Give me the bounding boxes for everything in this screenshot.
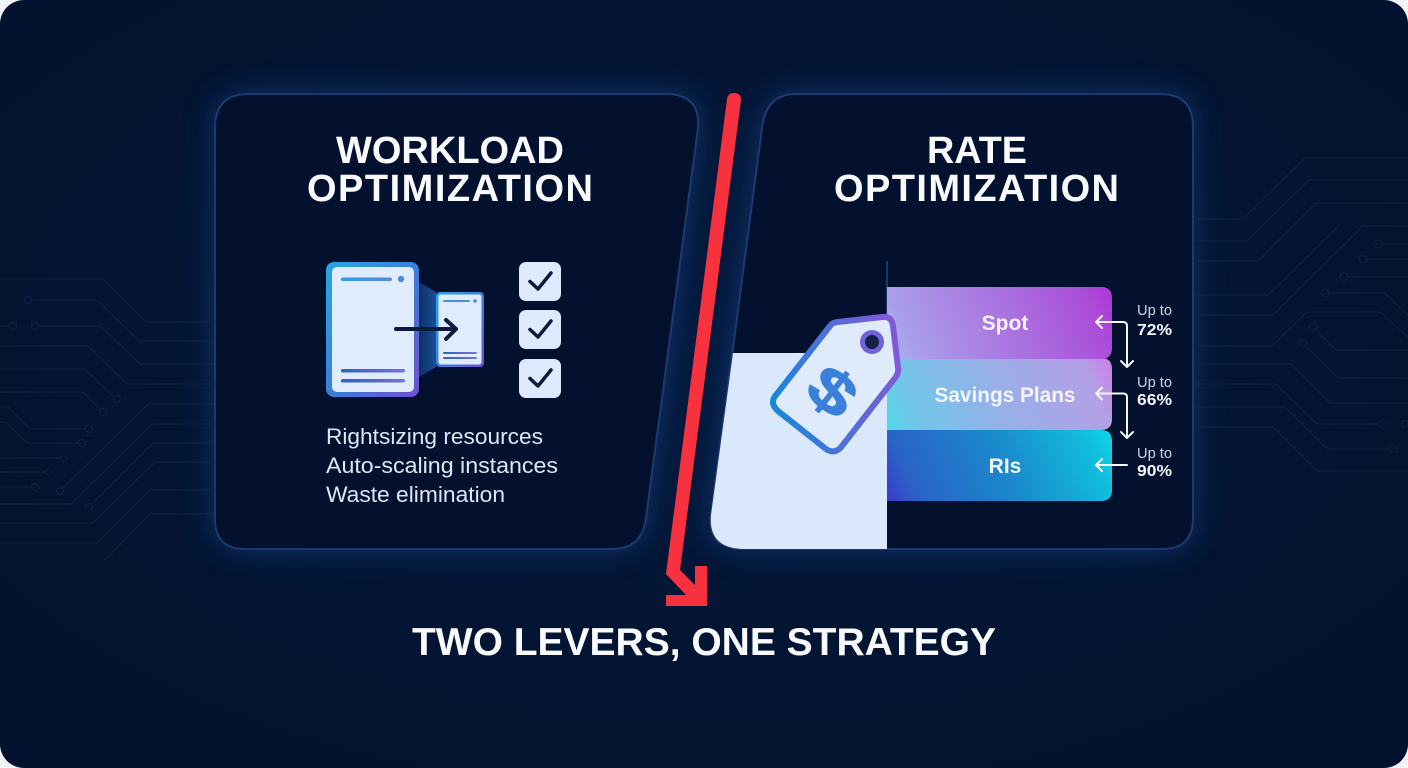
light price block (711, 353, 887, 549)
panel outline (711, 94, 1193, 549)
heading: rate optimization: RATE (927, 130, 1027, 172)
panel outline (215, 94, 698, 549)
list: workload tactics (326, 424, 558, 507)
icon: price tag: $ (794, 351, 871, 432)
tier: spot: Spot (982, 312, 1028, 335)
title: two levers, one strategy: TWO LEVERS, ONE STRATEGY (412, 621, 996, 664)
tier: savings plans (887, 358, 1112, 430)
heading: workload optimization: OPTIMIZATION (307, 168, 593, 210)
icon: check boxes (519, 262, 561, 398)
list: workload tactics: Auto-scaling instances (326, 453, 558, 478)
tier: savings plans: Savings Plans (934, 384, 1076, 407)
savings figures: 66% (1137, 392, 1172, 409)
list: workload tactics: Rightsizing resources (326, 424, 543, 449)
heading: rate optimization: OPTIMIZATION (834, 168, 1119, 210)
arrows: tier connectors (1096, 316, 1133, 471)
tier: ris: RIs (989, 455, 1021, 478)
icon: price tag (773, 317, 898, 451)
savings figures: 72% (1137, 322, 1172, 339)
heading: rate optimization (834, 130, 1119, 210)
tier: ris (887, 430, 1112, 501)
list: workload tactics: Waste elimination (326, 482, 505, 507)
heading: workload optimization: WORKLOAD (336, 130, 564, 172)
panel: workload optimization (215, 94, 698, 549)
savings figures: 90% (1137, 463, 1172, 480)
tier: spot (887, 287, 1112, 359)
savings figures: Up to (1137, 375, 1172, 391)
panel: rate optimization (711, 94, 1193, 549)
arrow: red divider (666, 93, 741, 606)
savings figures: Up to (1137, 446, 1172, 462)
savings figures: Up to (1137, 303, 1172, 319)
heading: workload optimization (307, 130, 593, 210)
icon: rightsizing documents (326, 262, 484, 397)
savings figures (1137, 303, 1172, 480)
savings tiers (887, 287, 1112, 501)
